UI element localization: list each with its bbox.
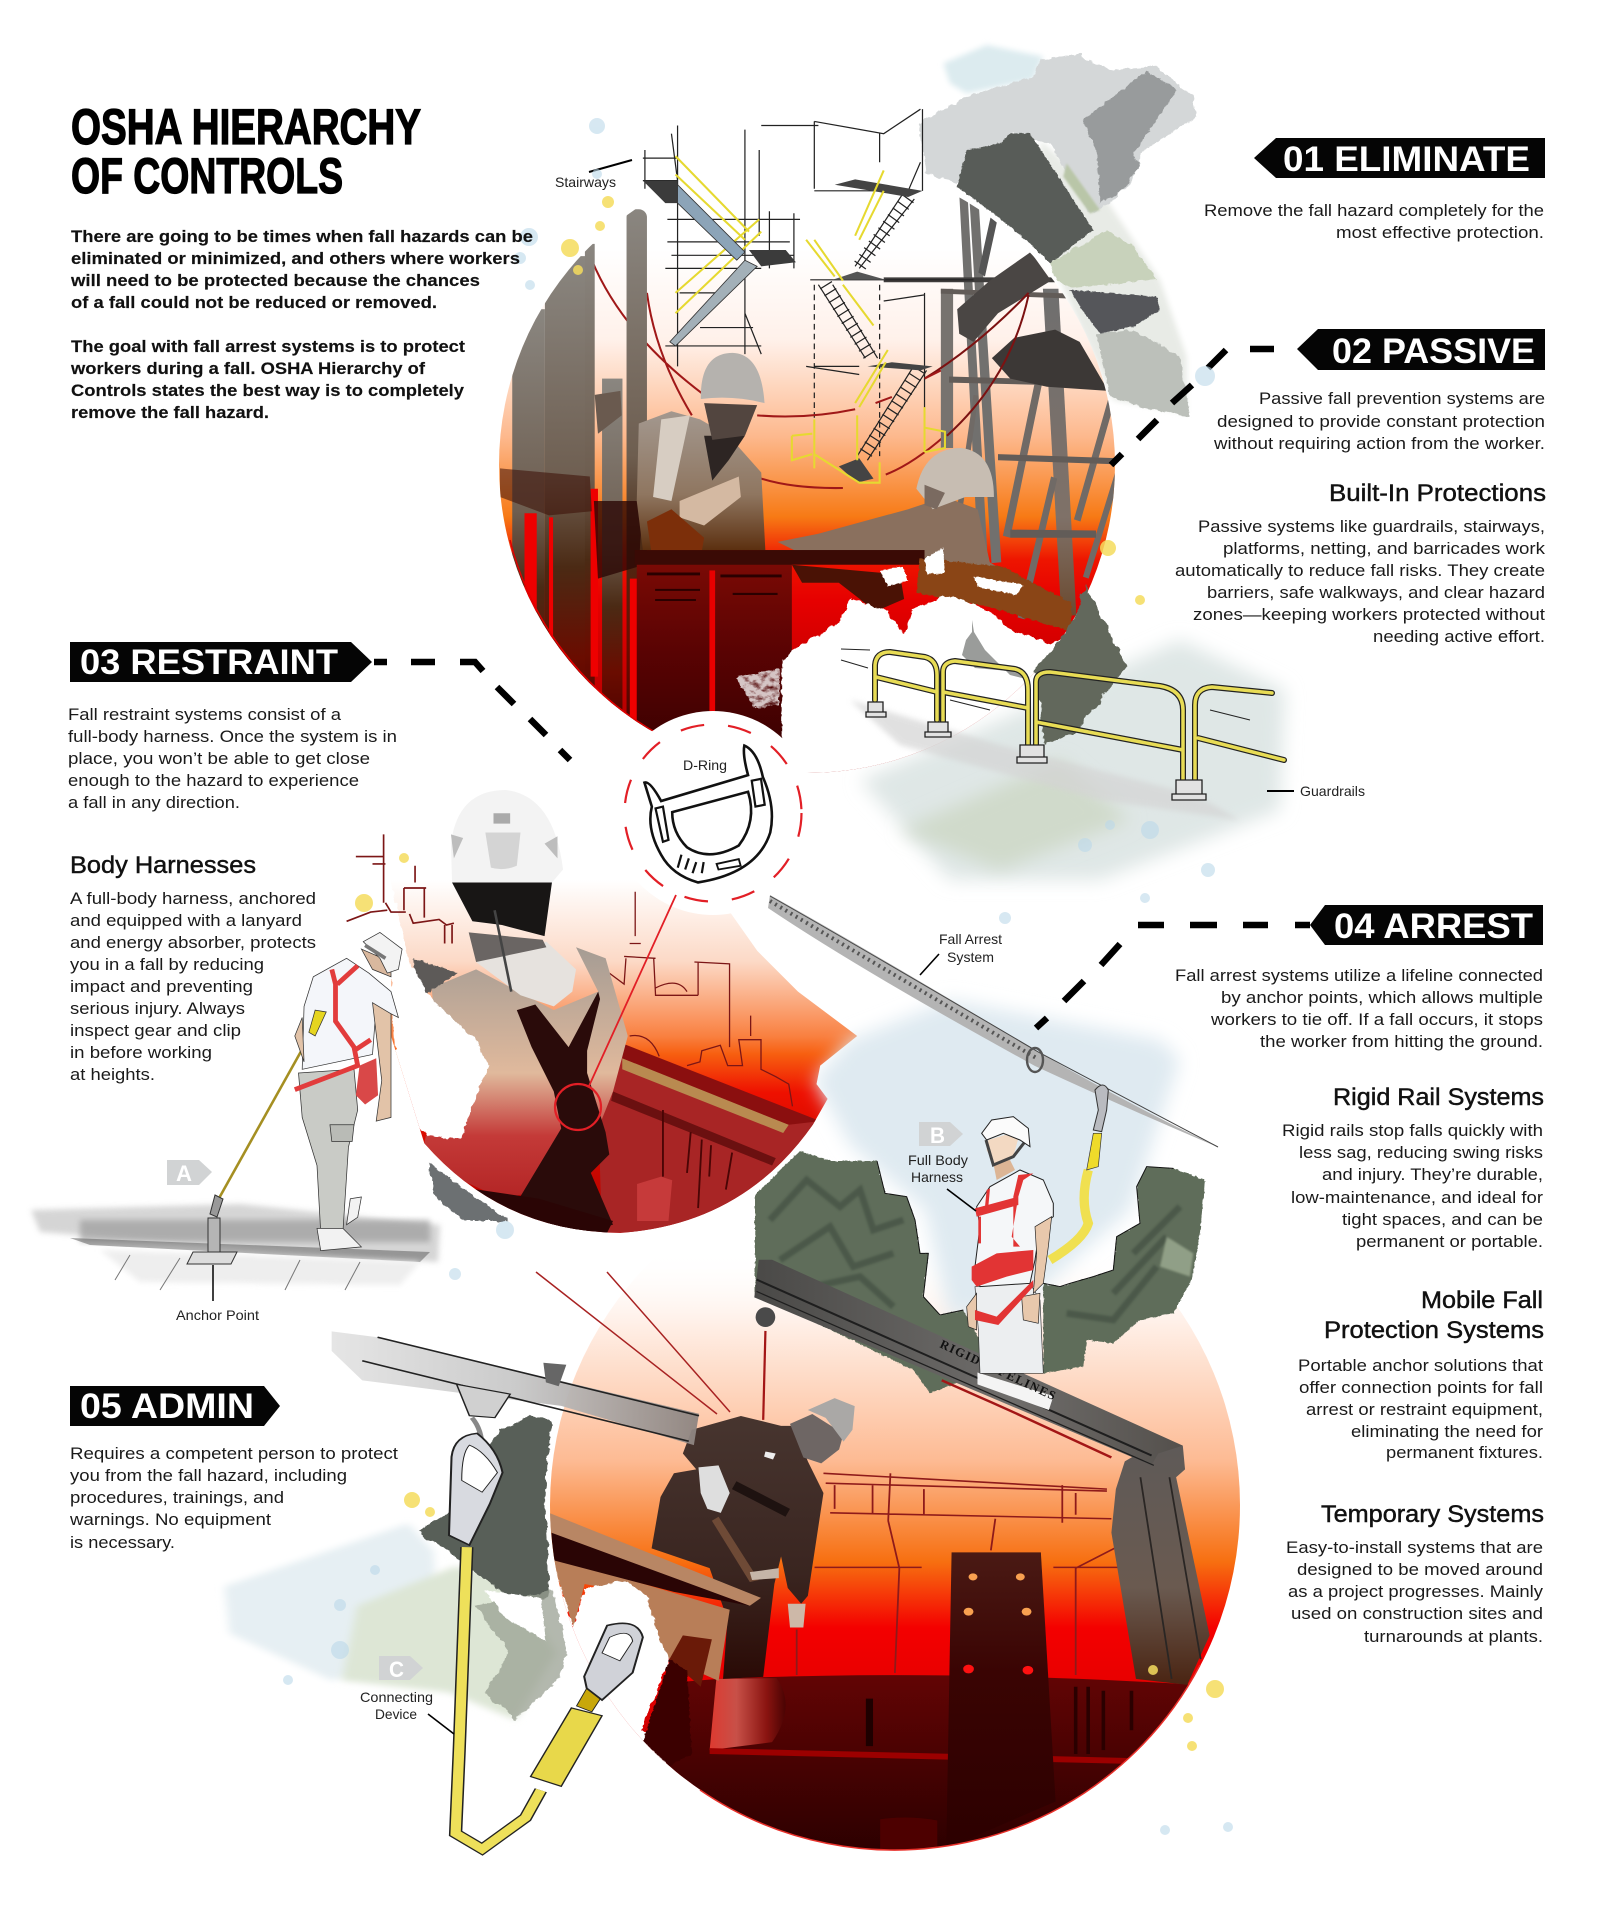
D-ring sketch: [644, 746, 772, 882]
label: full body harness: Harness: [911, 1169, 963, 1185]
worker's back: [424, 882, 628, 1236]
watercolour splatters: [283, 118, 1233, 1835]
text: rigid rail systems: Rigid rails stop falls quickly with: [1282, 1121, 1543, 1140]
white torn edge lower right: [780, 596, 1061, 773]
red gaps between poles: [524, 489, 640, 726]
text: mobile fall protection systems: Portable anchor solutions that: [1298, 1356, 1543, 1375]
intro text block: of a fall could not be reduced or removed.: [71, 293, 437, 312]
text: body harnesses: inspect gear and clip: [70, 1021, 241, 1040]
text: built-in protections: [1175, 517, 1546, 646]
photo circle: worker, column and floor: [550, 1293, 1240, 1850]
column with bolt holes: [947, 1552, 1056, 1818]
text: 03 restraint: a fall in any direction.: [68, 793, 240, 812]
intro text block: eliminated or minimized, and others where workers: [71, 249, 520, 268]
text: 01 eliminate: Remove the fall hazard completely for the: [1204, 201, 1544, 220]
wash behind worker B: [815, 1000, 1180, 1320]
text: 04 arrest: the worker from hitting the ground.: [1260, 1032, 1543, 1051]
text: 05 admin: [69, 1444, 398, 1552]
white helmet: [451, 790, 563, 882]
grey brush texture top right: [918, 45, 1197, 417]
subheading: rigid rail systems: Rigid Rail Systems: [1333, 1084, 1544, 1111]
intro text block: will need to be protected because the chances: [70, 271, 480, 290]
text: rigid rail systems: tight spaces, and can be: [1342, 1210, 1543, 1229]
wash and brush behind lanyard: [224, 1416, 566, 1720]
absorber: [309, 1010, 326, 1036]
harness: [972, 1173, 1033, 1325]
subheading: mobile fall protection systems: Protection Systems: [1324, 1317, 1544, 1344]
worker one in white hard hat: [595, 353, 765, 550]
red wall: [598, 1043, 820, 1232]
title: OF CONTROLS: [71, 148, 343, 204]
tag: B: [919, 1122, 963, 1148]
text: built-in protections: automatically to reduce fall risks. They create: [1175, 561, 1545, 580]
text: 03 restraint: enough to the hazard to experience: [68, 771, 359, 790]
title: [71, 99, 421, 204]
text: body harnesses: you in a fall by reducing: [70, 955, 264, 974]
neck and face: [993, 1160, 1015, 1180]
dark green backdrop behind guardrails: [1035, 585, 1126, 745]
scaffold poles: [512, 209, 647, 758]
intro text block: [70, 227, 533, 422]
ring on the lifeline: [1027, 1048, 1043, 1072]
subheading: mobile fall protection systems: Mobile Fall: [1421, 1287, 1543, 1314]
rail brand text: RIGID LIFELINES: [938, 1337, 1058, 1403]
small boat silhouette: [962, 620, 1030, 680]
label: stairways: [555, 160, 632, 190]
worker B with harness and lanyard: [967, 1085, 1108, 1373]
rebar and right side poles: [884, 191, 1122, 619]
text: rigid rail systems: [1282, 1121, 1543, 1251]
helmet: [982, 1117, 1030, 1147]
text: 05 admin: warnings. No equipment: [69, 1510, 271, 1529]
dark brush shapes on the circle edge: [957, 133, 1160, 333]
section heading: 01 eliminate: 01 ELIMINATE: [1283, 140, 1530, 179]
worker in dark overalls: [652, 1398, 855, 1679]
rigid rail upright: [1111, 1442, 1210, 1685]
dark wash under worker circle: [428, 1162, 509, 1221]
rails: [875, 652, 1284, 780]
dark floor: [654, 1675, 1188, 1849]
text: 01 eliminate: [1204, 201, 1544, 242]
text: 04 arrest: Fall arrest systems utilize a lifeline connected: [1175, 966, 1543, 985]
locker: [635, 550, 1071, 777]
text: temporary systems: designed to be moved around: [1297, 1560, 1543, 1579]
text: body harnesses: in before working: [70, 1043, 212, 1062]
intro text block: Controls states the best way is to completely: [71, 381, 465, 400]
label: full body harness: Full Body: [908, 1152, 968, 1168]
text: mobile fall protection systems: [1298, 1356, 1543, 1462]
text: 03 restraint: [68, 705, 397, 812]
text: built-in protections: needing active effort.: [1373, 627, 1545, 646]
sketch: rolling stair tower: [757, 109, 974, 483]
label: fall arrest system: System: [947, 949, 994, 965]
photo circle: workers on scaffold: [499, 198, 1115, 773]
subheading: body harnesses: Body Harnesses: [70, 852, 256, 879]
lifeline cable: [768, 895, 1220, 1148]
dark burn near tear: [643, 1659, 692, 1766]
section heading: 02 passive: 02 PASSIVE: [1332, 332, 1535, 371]
text: 01 eliminate: most effective protection.: [1336, 223, 1544, 242]
text: 03 restraint: place, you won’t be able to get close: [68, 749, 370, 768]
text: built-in protections: zones—keeping workers protected without: [1193, 605, 1545, 624]
anchor post: [187, 1195, 237, 1264]
text: 02 passive: Passive fall prevention systems are: [1259, 389, 1545, 408]
text: temporary systems: [1286, 1538, 1544, 1646]
intro text block: The goal with fall arrest systems is to protect: [71, 337, 465, 356]
intro text block: remove the fall hazard.: [71, 403, 269, 422]
text: rigid rail systems: less sag, reducing swing risks: [1299, 1143, 1543, 1162]
connector dashes: 02 passive: [1111, 349, 1274, 465]
text: 02 passive: without requiring action from the worker.: [1213, 434, 1545, 453]
top snap hook: [457, 1384, 510, 1418]
text: mobile fall protection systems: eliminating the need for: [1351, 1422, 1543, 1441]
skyline sketch left of worker: [347, 834, 454, 944]
text: mobile fall protection systems: offer connection points for fall: [1299, 1378, 1543, 1397]
rigid lifelines rail: [754, 1260, 1183, 1465]
subheading: mobile fall protection systems: [1324, 1287, 1544, 1344]
text: built-in protections: barriers, safe walkways, and clear hazard: [1207, 583, 1545, 602]
text: 05 admin: procedures, trainings, and: [70, 1488, 284, 1507]
tag: C: C: [389, 1657, 404, 1682]
label: connecting device: Device: [375, 1706, 417, 1722]
guardrail illustration: [841, 620, 1284, 820]
tag: B: B: [930, 1123, 945, 1148]
label: connecting device: [360, 1689, 454, 1734]
text: body harnesses: A full-body harness, anchored: [70, 889, 316, 908]
photo circle: worker from behind: [391, 882, 857, 1233]
text: 03 restraint: Fall restraint systems consist of a: [68, 705, 342, 724]
tag: C: [379, 1656, 423, 1682]
red rope over hands: [925, 293, 1029, 436]
D-ring callout: D-Ring: [683, 757, 727, 773]
label: guardrails: [1267, 783, 1365, 799]
text: mobile fall protection systems: arrest or restraint equipment,: [1306, 1400, 1543, 1419]
boots: [317, 1228, 361, 1251]
worker two leaning: [778, 448, 996, 566]
text: body harnesses: at heights.: [70, 1065, 155, 1084]
label: guardrails: Guardrails: [1300, 783, 1365, 799]
label: fall arrest system: [920, 931, 1002, 975]
white torn edge over crate: [556, 1570, 669, 1763]
intro text block: workers during a fall. OSHA Hierarchy of: [70, 359, 425, 378]
title: OSHA HIERARCHY: [71, 99, 421, 155]
text: body harnesses: and equipped with a lanyard: [70, 911, 302, 930]
text: 04 arrest: by anchor points, which allows multiple: [1221, 988, 1543, 1007]
subheading: built-in protections: Built-In Protections: [1329, 480, 1546, 507]
sketch beam: [797, 1473, 1120, 1675]
tag: A: [167, 1160, 212, 1186]
green brush foliage: [755, 1151, 1205, 1393]
shirt: [975, 1170, 1053, 1287]
body harness worker A: [220, 932, 402, 1251]
skyline sketch: [609, 892, 792, 1106]
text: rigid rail systems: permanent or portable.: [1356, 1232, 1543, 1251]
text: 04 arrest: workers to tie off. If a fall occurs, it stops: [1210, 1010, 1543, 1029]
intro text block: There are going to be times when fall hazards can be: [71, 227, 533, 246]
D-ring callout: [555, 711, 815, 1130]
lanyard: [220, 1036, 310, 1197]
section heading: 05 admin: 05 ADMIN: [80, 1387, 254, 1426]
section heading: 03 restraint: 03 RESTRAINT: [80, 643, 338, 682]
text: rigid rail systems: low-maintenance, and ideal for: [1291, 1188, 1543, 1207]
label: full body harness: [908, 1152, 976, 1211]
text: temporary systems: as a project progresses. Mainly: [1288, 1582, 1544, 1601]
text: 03 restraint: full-body harness. Once the system is in: [68, 727, 397, 746]
red rim of the large circle: [700, 1665, 1200, 1850]
label: connecting device: Connecting: [360, 1689, 433, 1705]
text: temporary systems: turnarounds at plants.: [1364, 1627, 1543, 1646]
speckled patch above the d-ring: [737, 668, 780, 707]
sketch: stairway scaffold: [643, 126, 818, 366]
section heading: 04 arrest: 04 ARREST: [1334, 907, 1533, 946]
bottom snap hook: [584, 1623, 643, 1700]
label: anchor point: [176, 1265, 259, 1323]
wash behind guardrails: [860, 640, 1285, 880]
head and helmet: [361, 949, 391, 977]
text: temporary systems: used on construction sites and: [1291, 1604, 1543, 1623]
red harness: [295, 966, 371, 1090]
ground shadow: [850, 700, 1240, 820]
shirt: [302, 958, 398, 1069]
red perspective rays: [536, 1272, 730, 1414]
text: body harnesses: [70, 889, 316, 1084]
label: fall arrest system: Fall Arrest: [939, 931, 1002, 947]
gloved hands: [957, 252, 1051, 342]
text: built-in protections: platforms, netting, and barricades work: [1223, 539, 1546, 558]
text: 02 passive: designed to provide constant protection: [1217, 412, 1545, 431]
label: anchor point: Anchor Point: [176, 1307, 259, 1323]
arms: [372, 1003, 391, 1121]
connector dashes: 03 restraint: [374, 662, 570, 760]
lanyard C with snap hooks: [449, 1384, 643, 1849]
text: 04 arrest: [1175, 966, 1543, 1051]
lanyard: [1050, 1170, 1088, 1260]
roof ledge below worker A: [31, 1204, 440, 1290]
label: stairways: Stairways: [555, 174, 616, 190]
crate: [549, 1513, 761, 1687]
text: body harnesses: and energy absorber, protects: [70, 933, 316, 952]
tag: A: A: [176, 1161, 192, 1186]
text: rigid rail systems: and injury. They’re durable,: [1322, 1165, 1543, 1184]
text: body harnesses: impact and preventing: [70, 977, 253, 996]
text: mobile fall protection systems: permanent fixtures.: [1386, 1443, 1543, 1462]
bases: [866, 702, 1206, 800]
white torn edge: [391, 892, 490, 1140]
pants: [975, 1283, 1043, 1373]
pants: [298, 1069, 358, 1232]
text: body harnesses: serious injury. Always: [70, 999, 245, 1018]
arms and hands: [1033, 1217, 1052, 1293]
red arc rope (behind worker): [592, 260, 945, 488]
text: 05 admin: you from the fall hazard, including: [70, 1466, 347, 1485]
text: built-in protections: Passive systems like guardrails, stairways,: [1198, 517, 1545, 536]
grey beam from the left: [332, 1331, 699, 1445]
text: 05 admin: Requires a competent person to protect: [70, 1444, 398, 1463]
connector dashes: 04 arrest: [1036, 925, 1310, 1028]
text: 05 admin: is necessary.: [70, 1533, 175, 1552]
text: 02 passive: [1213, 389, 1545, 453]
text: temporary systems: Easy-to-install systems that are: [1286, 1538, 1543, 1557]
grey speckle at left edge: [412, 958, 458, 994]
subheading: temporary systems: Temporary Systems: [1321, 1501, 1544, 1528]
